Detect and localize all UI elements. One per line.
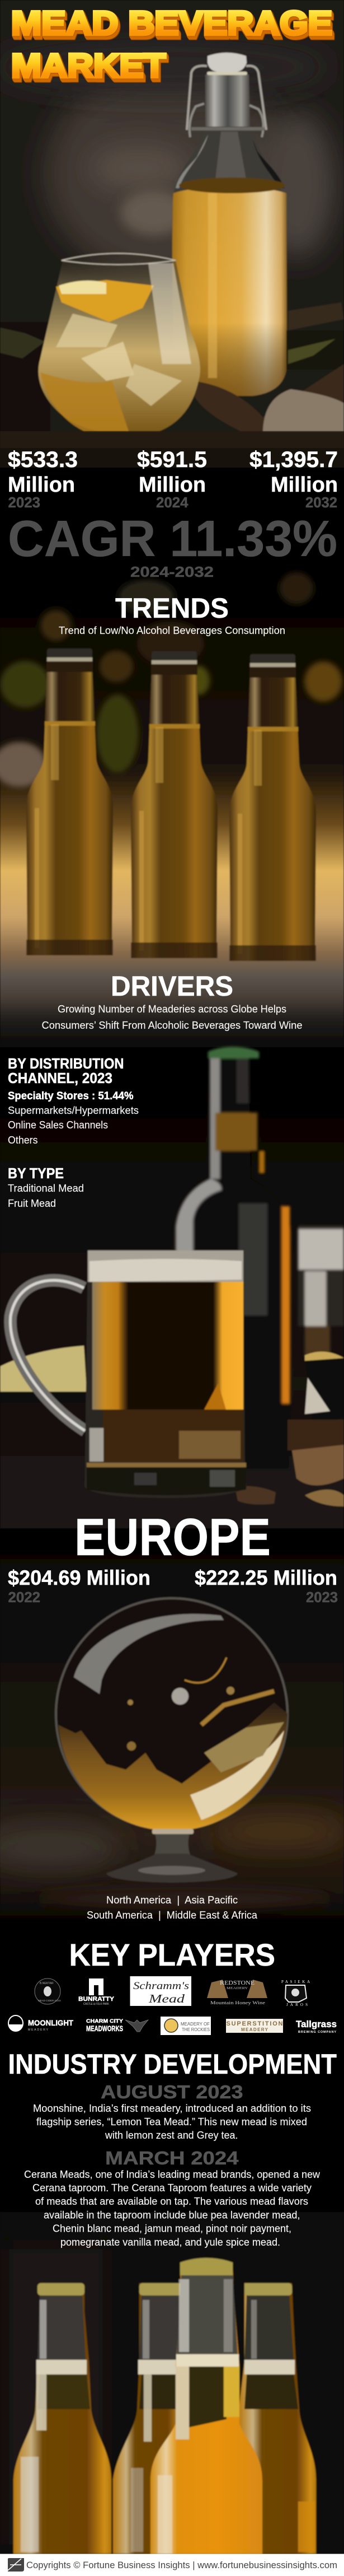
logo: Tallgrass Brewing: BREWING COMPANY — [298, 2031, 336, 2034]
logo: Charm City Meadworks: CHARM CITY — [86, 2018, 124, 2024]
description: Chenin blanc mead, jamun mead, pinot noir payment, — [53, 2223, 291, 2234]
copyright text: Copyrights © Fortune Business Insights | www.fortunebusinessinsights.com — [26, 2560, 337, 2570]
logo: Schramm's Mead: Schramm's — [133, 1980, 189, 1992]
logo: Pasieka Jaros: PASIEKA — [281, 1980, 310, 1984]
logo: Bunratty: CASTLE & FOLK PARK — [83, 2003, 110, 2006]
list: channels — [8, 1090, 139, 1146]
logo: Redstone Meadery: Mountain Honey Wine — [210, 2000, 265, 2005]
icon: snacks and board — [0, 1346, 344, 1506]
title — [11, 4, 332, 85]
text: drivers description: Consumers’ Shift From Alcoholic Beverages Toward Wine — [41, 1020, 302, 1031]
description: available in the taproom include blue pea lavender mead, — [44, 2210, 300, 2221]
stat 2032: $1,395.7 — [249, 447, 338, 472]
logo: Pasieka Jaros: JAROS — [286, 2003, 308, 2007]
logo: Redstone Meadery: REDSTONE — [220, 1980, 255, 1986]
panel: segmentation by type — [8, 1166, 84, 1209]
logo: Meadery of the Rockies: THE ROCKIES — [182, 2027, 210, 2032]
icon: back-middle bottle — [113, 2283, 192, 2554]
icon: bottle 3 — [229, 654, 316, 961]
icon: back-right bottle — [239, 2283, 316, 2554]
stat 2023 — [8, 447, 78, 511]
heading: by type: BY TYPE — [8, 1166, 64, 1182]
table props: leaves, wood and cloth — [0, 302, 344, 431]
panel: market figures — [0, 431, 344, 599]
title: MARKET — [11, 47, 166, 85]
CAGR period: 2024-2032 — [130, 563, 214, 580]
panel: trends photo with three bottles — [0, 572, 344, 1047]
logo: Superstition Meadery: MEADERY — [241, 2027, 268, 2032]
panel: bottom photo with four bottles — [0, 2212, 344, 2554]
stat 2023: 2023 — [8, 495, 40, 511]
stat 2024 — [137, 447, 207, 511]
logo: Pasieka Jaros — [281, 1980, 310, 2007]
icon: back-left bottle — [13, 2283, 111, 2554]
list: channels: Specialty Stores : 51.44% — [8, 1090, 134, 1102]
hero photo: mead bottle and glass — [0, 0, 344, 470]
icon: bottle 1 — [26, 648, 113, 955]
icon: flip-top bottle — [172, 53, 287, 396]
heading: europe: EUROPE — [74, 1508, 271, 1566]
stat 2023: $533.3 — [8, 447, 78, 472]
logo: Redstone Meadery — [207, 1980, 267, 2005]
logo: Schramm's Mead: Mead — [148, 1992, 185, 2005]
heading: distribution channel: BY DISTRIBUTION — [8, 1056, 124, 1072]
logo: B. Nektar: B.NEKTAR — [40, 1982, 54, 1985]
text: other regions — [87, 1894, 258, 1921]
description: Cerana Meads, one of India’s leading mead brands, opened a new — [24, 2169, 321, 2180]
logo: Bunratty: BUNRATTY — [78, 1996, 115, 2003]
description: Moonshine, India’s first meadery, introduced an addition to its — [33, 2103, 311, 2114]
stat 2032: 2032 — [305, 495, 337, 511]
icon: tumbler with ice and lemon — [39, 253, 200, 432]
heading: trends: TRENDS — [115, 592, 229, 624]
panel: August 2023 development — [33, 2082, 311, 2141]
stat: europe 2022: $204.69 Million — [8, 1566, 150, 1589]
icon: bottle 2 — [131, 651, 218, 958]
description: pomegranate vanilla mead, and yule spice mead. — [60, 2237, 280, 2248]
stat: europe 2023 — [195, 1566, 338, 1606]
logo: Moonlight Meadery: MOONLIGHT — [28, 2018, 73, 2027]
stat 2024: 2024 — [156, 495, 189, 511]
logo: Meadery of the Rockies: MEADERY OF — [181, 2021, 210, 2027]
text: drivers description — [41, 1004, 302, 1031]
logo: Moonlight Meadery: MEADERY — [28, 2028, 49, 2032]
heading: key players: KEY PLAYERS — [69, 1937, 275, 1972]
text: trends description: Trend of Low/No Alcohol Beverages Consumption — [59, 625, 285, 636]
description: with lemon zest and Grey tea. — [105, 2130, 238, 2141]
text: drivers description: Growing Number of Meaderies across Globe Helps — [58, 1004, 286, 1015]
stat 2032: Million — [271, 473, 338, 497]
stat 2032 — [249, 447, 338, 511]
logo: Bunratty — [78, 1978, 115, 2006]
description: flagship series, “Lemon Tea Mead.” This new mead is mixed — [36, 2116, 307, 2127]
logo: Moonlight Meadery — [8, 2015, 73, 2032]
date: AUGUST 2023 — [101, 2082, 243, 2102]
list: channels: Others — [8, 1135, 38, 1146]
footer — [0, 2554, 344, 2576]
text: other regions: South America | Middle East & Africa — [87, 1910, 258, 1921]
date: MARCH 2024 — [105, 2148, 239, 2168]
logo: Superstition Meadery: SUPERSTITION — [226, 2020, 283, 2027]
stat: europe 2023: 2023 — [306, 1590, 338, 1606]
icon: dark bottle — [176, 1047, 291, 1469]
CAGR figure: CAGR 11.33% — [8, 511, 337, 567]
logo: Charm City Meadworks — [86, 2018, 148, 2033]
description — [33, 2103, 311, 2141]
logo: Superstition Meadery — [226, 2019, 283, 2033]
description: Cerana taproom. The Cerana Taproom features a wide variety — [32, 2182, 312, 2194]
logo: Tallgrass Brewing: Tallgrass — [296, 2019, 337, 2029]
logo: Meadery of the Rockies — [161, 2017, 211, 2035]
panel: key player logos — [8, 1976, 337, 2035]
stat: europe 2022: 2022 — [8, 1590, 40, 1606]
icon: beer mug — [11, 1250, 247, 1498]
description — [24, 2169, 321, 2248]
list: types — [8, 1183, 84, 1209]
stat 2024: Million — [139, 473, 206, 497]
logo: Charm City Meadworks: MEADWORKS — [86, 2024, 123, 2033]
logo: Schramm's Mead — [130, 1976, 191, 2006]
panel: europe with swirling glass — [0, 1529, 344, 1921]
logo: B. Nektar — [35, 1978, 61, 2004]
list: types: Fruit Mead — [8, 1198, 56, 1209]
panel: segmentation by distribution channel — [8, 1056, 139, 1146]
icon: second glass — [298, 1225, 344, 1357]
text: other regions: North America | Asia Pacific — [106, 1894, 238, 1906]
title: MEAD BEVERAGE — [11, 4, 332, 42]
list: channels: Supermarkets/Hypermarkets — [8, 1105, 139, 1116]
description: of meads that are available on tap. The various mead flavors — [35, 2196, 308, 2207]
heading: drivers: DRIVERS — [111, 970, 233, 1002]
stat 2023: Million — [8, 473, 75, 497]
icon: glass sphere with mead swirl — [56, 1598, 288, 1883]
heading: distribution channel — [8, 1056, 124, 1086]
stat: europe 2023: $222.25 Million — [195, 1566, 337, 1589]
heading: distribution channel: CHANNEL, 2023 — [8, 1071, 112, 1086]
list: types: Traditional Mead — [8, 1183, 84, 1194]
panel: beer mug scene — [0, 1047, 344, 1529]
panel: March 2024 development — [24, 2148, 321, 2248]
hero lower fade — [0, 431, 344, 470]
icon: front bottle — [150, 2258, 262, 2554]
icon: Fortune Business Insights logo — [8, 2558, 24, 2572]
stat: europe 2022 — [8, 1566, 150, 1606]
stat 2024: $591.5 — [137, 447, 207, 472]
list: channels: Online Sales Channels — [8, 1119, 108, 1131]
logo: B. Nektar: MEAD CIDER ALES — [38, 1999, 61, 2002]
logo: Redstone Meadery: MEADERY — [227, 1987, 248, 1990]
